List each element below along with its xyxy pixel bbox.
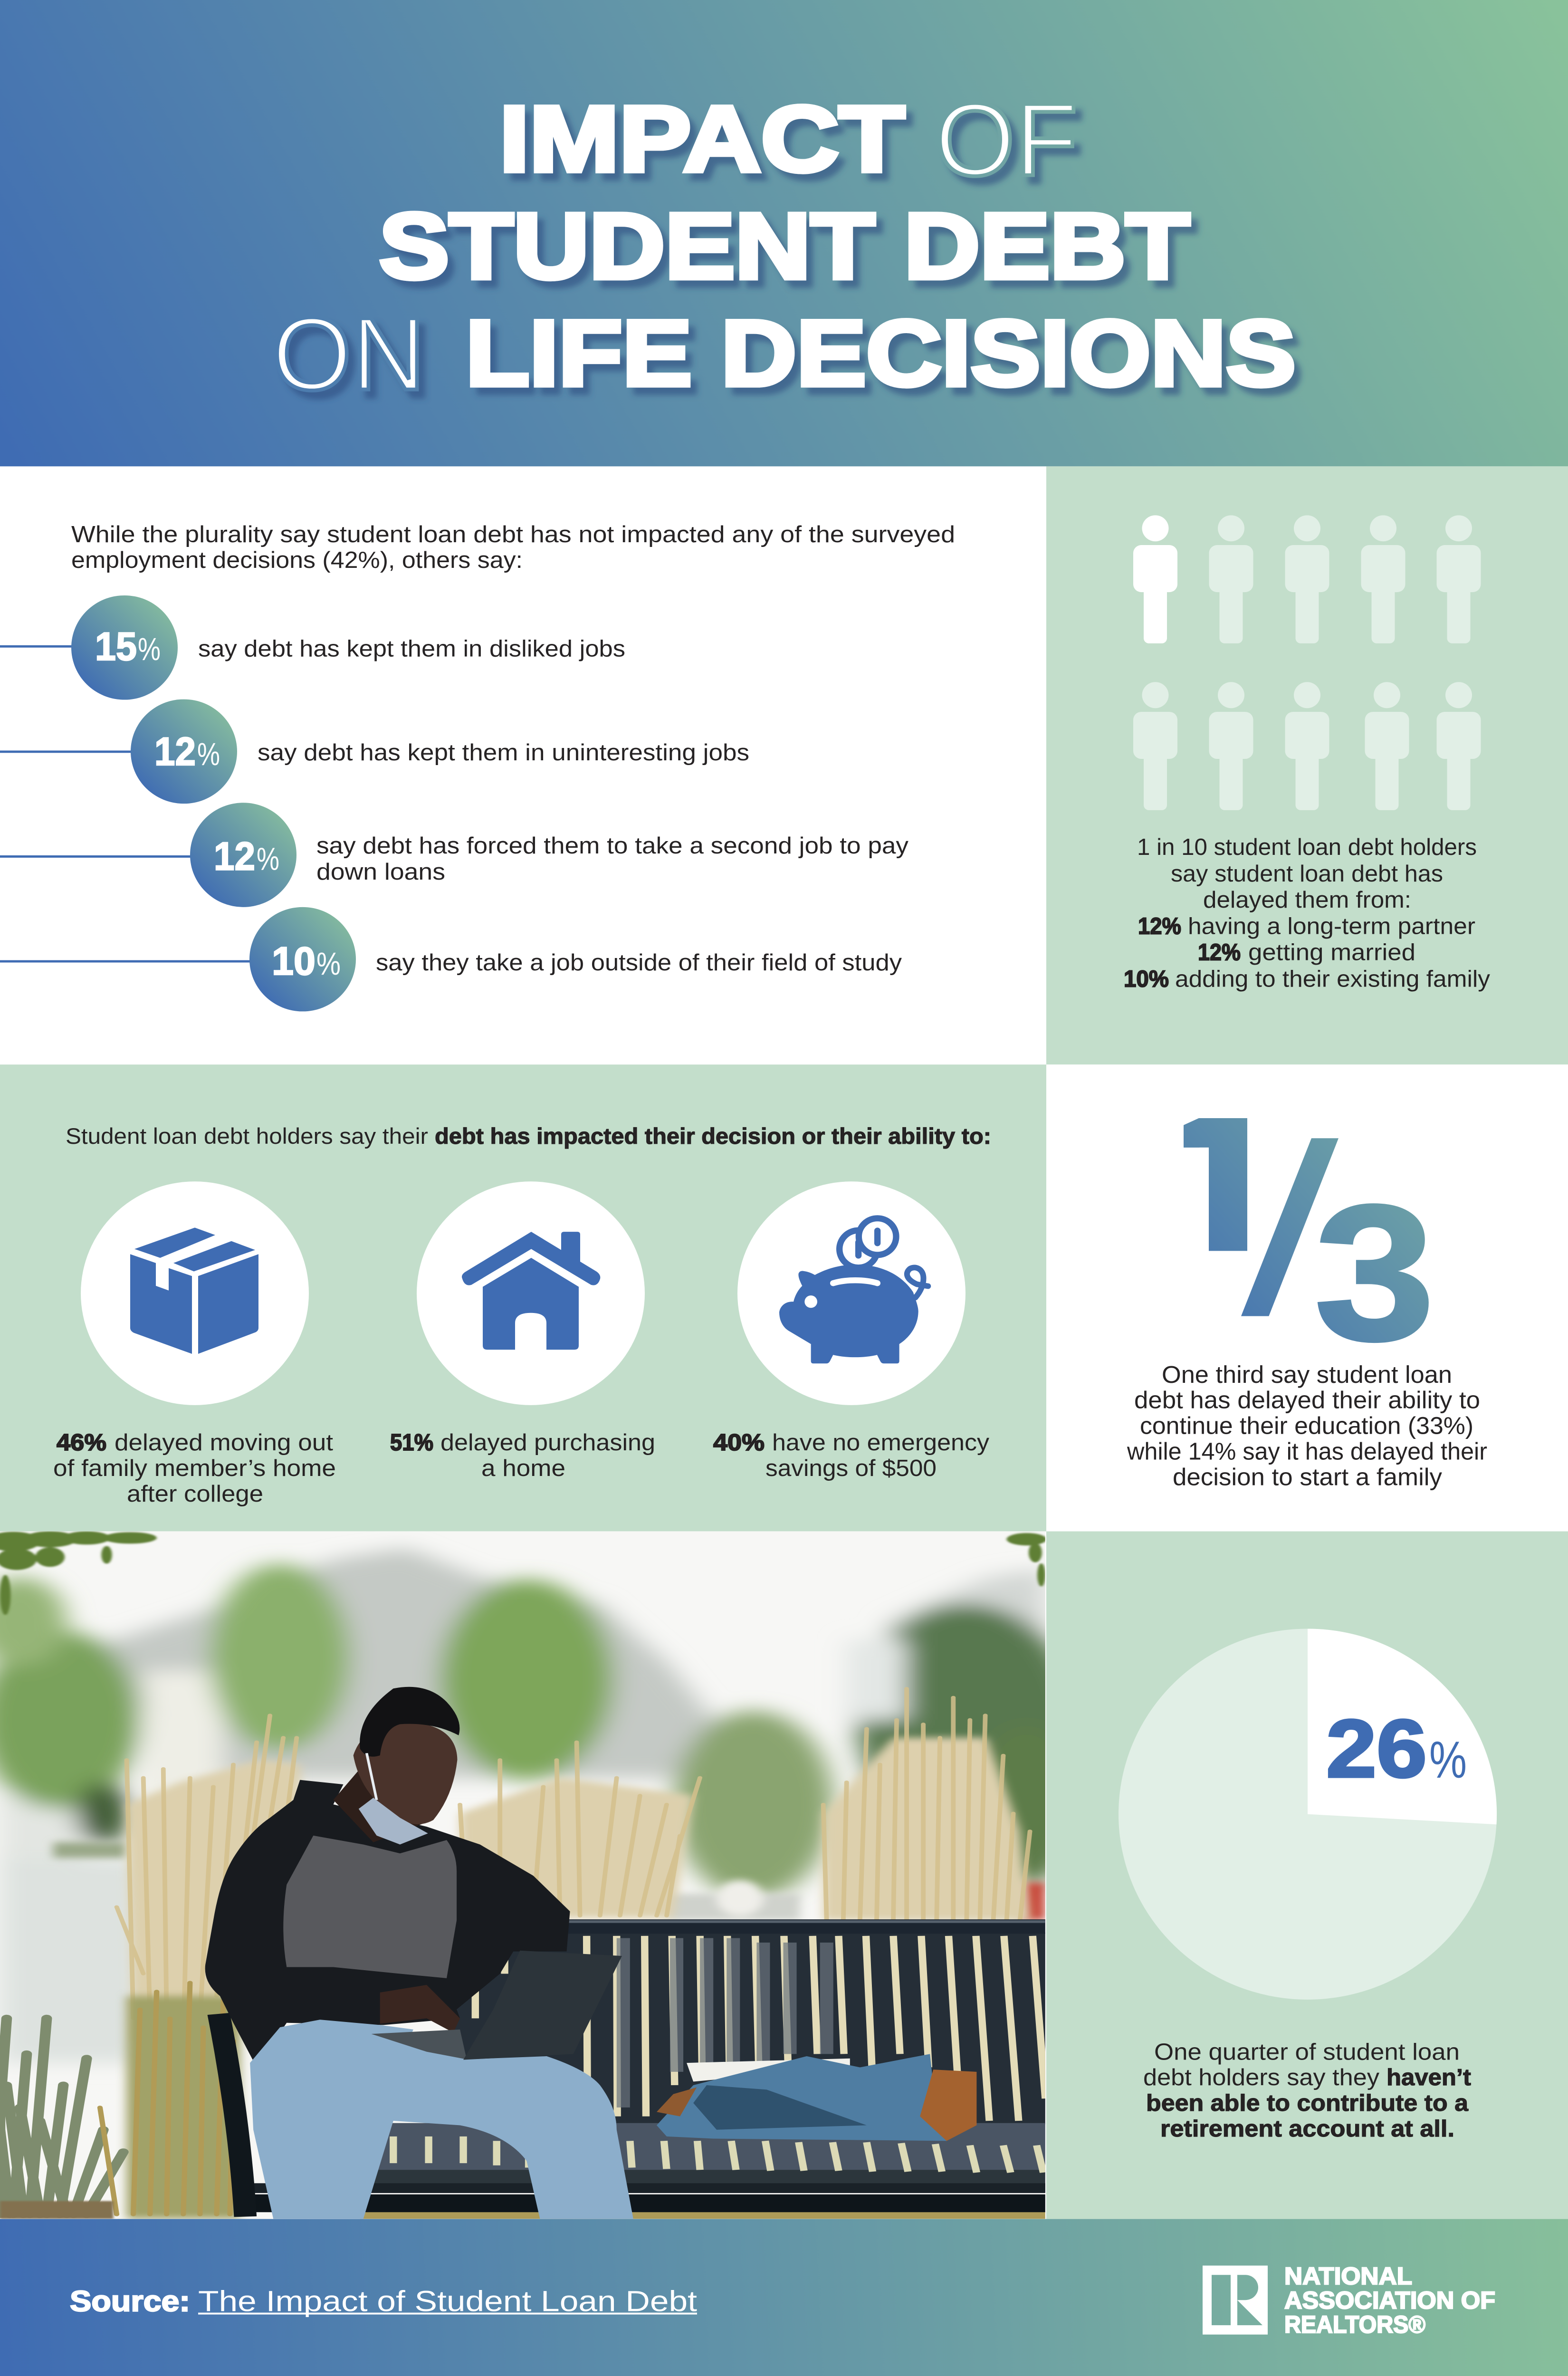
- text: 46 percent: after college: [127, 1481, 263, 1507]
- stat: 15 percent disliked jobs: 15: [95, 624, 137, 669]
- text: 40 percent: 40%: [713, 1429, 765, 1456]
- text: delayed from: having a long-term partner: [1188, 913, 1475, 939]
- panel: 1 in 10 pictogram: [1046, 466, 1568, 1064]
- stat: 12 percent second job: %: [257, 842, 279, 877]
- ornamental grass plumes: [127, 1737, 1030, 2041]
- man: neck and face: [334, 1687, 459, 1845]
- text: delayed from: delayed them from:: [1203, 887, 1411, 913]
- stat: 12 percent second job: 12: [214, 834, 255, 878]
- stat: 12 percent uninteresting jobs: say debt has kept them in uninteresting jobs: [258, 739, 749, 766]
- man: grey hoodie panel: [283, 1836, 457, 1978]
- man: jeans: [250, 2020, 633, 2219]
- text: one third: while 14% say it has delayed their: [1127, 1437, 1487, 1465]
- logo wordmark: [1284, 2262, 1495, 2338]
- heading: [66, 1124, 991, 1149]
- text: 46 percent: 46%: [57, 1429, 106, 1456]
- title: STUDENT DEBT: [379, 194, 1190, 298]
- title: [272, 82, 1296, 412]
- photo: student on bench with laptop: [0, 1531, 1080, 2219]
- text: 40 percent: have no emergency: [772, 1429, 989, 1456]
- text: delayed from: say student loan debt has: [1171, 861, 1443, 887]
- pie chart: [1119, 1629, 1497, 2000]
- text: 46 percent: [53, 1429, 336, 1507]
- pie chart: 26: [1326, 1703, 1427, 1794]
- text: delayed from: 1 in 10 student loan debt holders: [1137, 834, 1477, 860]
- text: delayed from: 10%: [1124, 966, 1169, 992]
- title: OF: [935, 82, 1078, 197]
- icon: house: [417, 1181, 645, 1405]
- big fraction: 1: [1151, 1076, 1304, 1292]
- panel: employment decisions: [0, 522, 955, 1011]
- stat: 12 percent uninteresting jobs: %: [197, 737, 220, 772]
- panel: footer: [0, 2219, 1568, 2376]
- text: retirement: been able to contribute to a: [1146, 2090, 1468, 2116]
- text: one third: continue their education (33%): [1140, 1412, 1473, 1439]
- text: delayed from: [1124, 834, 1490, 992]
- icon: people row 1: [1133, 515, 1481, 643]
- text: retirement: [1143, 2039, 1471, 2142]
- bench: [219, 1919, 1045, 2217]
- stat: 12 percent second job: say debt has forced them to take a second job to pay: [316, 833, 908, 859]
- text: 51 percent: [390, 1429, 655, 1481]
- text: delayed from: 12%: [1138, 913, 1181, 939]
- man: hoodie: [205, 1780, 570, 2067]
- text: 40 percent: [713, 1429, 989, 1481]
- heading: debt has impacted their decision or their ability to:: [435, 1124, 991, 1149]
- backpack and book: [657, 2054, 976, 2141]
- logo wordmark: NATIONAL: [1284, 2262, 1412, 2290]
- panel: one third: [1046, 1064, 1568, 1532]
- text: one third: decision to start a family: [1173, 1463, 1442, 1490]
- text: one third: debt has delayed their ability to: [1134, 1386, 1480, 1414]
- text: 46 percent: delayed moving out: [115, 1429, 333, 1456]
- laptop: [371, 1951, 622, 2060]
- stat: 15 percent disliked jobs: say debt has kept them in disliked jobs: [198, 636, 625, 661]
- text: one third: [1127, 1360, 1487, 1490]
- stat: 15 percent disliked jobs: [0, 595, 625, 700]
- logo wordmark: REALTORS®: [1284, 2310, 1425, 2338]
- stat: 12 percent second job: [0, 803, 908, 907]
- heading: Student loan debt holders say their: [66, 1124, 428, 1149]
- text: 51 percent: a home: [481, 1455, 565, 1481]
- icon: people row 2: [1133, 682, 1481, 810]
- text: one third: One third say student loan: [1162, 1360, 1452, 1388]
- text: 51 percent: delayed purchasing: [440, 1429, 655, 1456]
- lower grasses: [0, 1983, 1045, 2219]
- icon: box: [81, 1181, 309, 1405]
- stat: 10 percent outside field: [0, 907, 902, 1011]
- source: [70, 2285, 697, 2318]
- text: retirement: retirement account at all.: [1160, 2116, 1454, 2142]
- title: ON: [272, 296, 425, 412]
- stat: 12 percent uninteresting jobs: [0, 699, 749, 804]
- big fraction: 3: [1314, 1165, 1435, 1380]
- pie chart: %: [1429, 1731, 1467, 1789]
- man: hand: [380, 1985, 460, 2032]
- intro text: employment decisions (42%), others say:: [71, 547, 523, 573]
- text: 46 percent: of family member’s home: [53, 1455, 336, 1481]
- text: retirement: haven’t: [1386, 2065, 1471, 2090]
- background scenery: [0, 1548, 1080, 2063]
- logo mark: [1203, 2266, 1268, 2335]
- stat: 15 percent disliked jobs: %: [138, 632, 161, 667]
- big fraction: [1184, 1118, 1429, 1343]
- text: delayed from: getting married: [1248, 939, 1415, 965]
- title: LIFE DECISIONS: [466, 301, 1296, 405]
- text: delayed from: adding to their existing family: [1175, 966, 1490, 992]
- text: delayed from: 12%: [1198, 939, 1241, 965]
- intro text: While the plurality say student loan debt has not impacted any of the surveyed: [71, 522, 955, 547]
- stat: 10 percent outside field: 10: [272, 939, 316, 983]
- text: 40 percent: savings of $500: [765, 1455, 937, 1481]
- stat: 10 percent outside field: %: [316, 947, 341, 982]
- intro text: [71, 522, 955, 573]
- source: Source:: [70, 2285, 190, 2318]
- title: IMPACT: [499, 87, 905, 191]
- text: retirement: One quarter of student loan: [1154, 2039, 1460, 2065]
- panel: retirement pie: [1046, 1532, 1568, 2219]
- panel: impacted decisions: [0, 1064, 1046, 1532]
- stat: 12 percent uninteresting jobs: 12: [154, 729, 196, 774]
- cars and blurred ground: [53, 1842, 1045, 1920]
- text: 51 percent: 51%: [390, 1429, 433, 1456]
- source: The Impact of Student Loan Debt: [198, 2285, 697, 2318]
- text: retirement: debt holders say they: [1143, 2065, 1379, 2090]
- stat: 10 percent outside field: say they take a job outside of their field of study: [376, 950, 902, 976]
- panel: title header: [0, 0, 1568, 466]
- icon: piggy bank: [737, 1181, 966, 1405]
- stat: 12 percent second job: down loans: [316, 859, 445, 885]
- logo wordmark: ASSOCIATION OF: [1284, 2286, 1495, 2314]
- big fraction: /: [1241, 1095, 1340, 1366]
- top leaves: [0, 1531, 1047, 1615]
